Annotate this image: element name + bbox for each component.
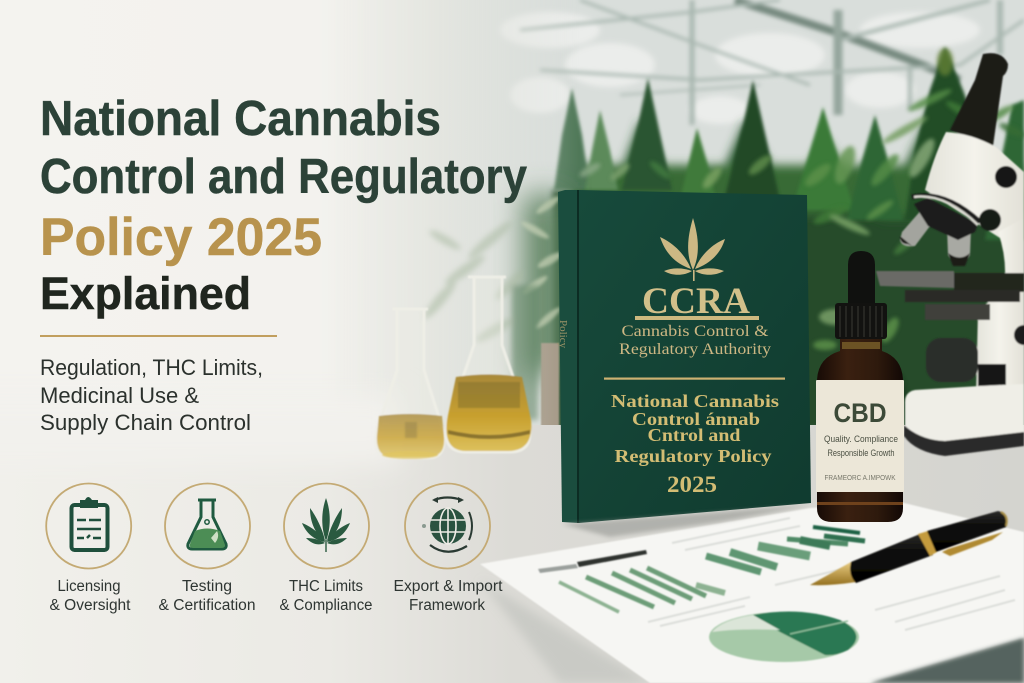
base [905,384,1024,450]
plants background [519,47,1024,435]
label: testing [158,578,256,614]
label: export import [394,578,503,614]
dropper bulb [848,251,875,305]
bottle: CBD dropper: FRAMEORC A.IMPOWK [824,473,896,482]
label: licensing: & Oversight [50,597,131,614]
book: CCRA policy [557,190,811,523]
subtitle: Regulation, THC Limits, [40,355,263,380]
book spine [558,190,579,523]
table surface [0,395,1024,683]
table front shadow [870,638,1024,683]
bottle: CBD dropper: Responsible Growth [828,448,894,458]
eyepiece tube [950,53,1008,146]
label: THC limits: & Compliance [280,597,372,614]
stage [876,271,954,288]
authority name: Cannabis Control & [622,323,768,340]
CCRA heading: CCRA [642,281,750,322]
label: testing: Testing [182,578,232,595]
label: testing: & Certification [158,597,256,614]
policy title on cover: Cntrol and [648,425,740,445]
flask small [376,309,444,459]
bar chart right [706,527,865,572]
hazy foliage behind flasks [421,218,538,420]
title: National Cannabis [40,92,441,146]
arm [975,218,1024,440]
background: greenhouse sky and roof [0,0,1024,440]
title: Explained [40,268,251,319]
ribbed cap [835,303,887,339]
label: licensing [50,578,131,614]
bottle: CBD dropper [816,251,904,522]
bottle body [817,339,903,522]
authority name: Regulatory Authority [619,341,771,358]
nosepiece [914,198,978,240]
foliage left of book [520,195,565,375]
title: Control and Regulatory [40,150,527,204]
policy title on cover: 2025 [667,472,717,497]
policy title on cover: Regulatory Policy [614,446,772,466]
leaf emblem [660,218,725,281]
label: export import: Export & Import [394,578,503,595]
icon: export import globe [405,484,490,568]
label: export import: Framework [409,597,485,614]
icon: licensing clipboard [46,484,131,568]
bottle: CBD dropper: CBD [834,398,886,428]
label: THC limits: THC Limits [289,578,363,595]
flask large [446,277,531,452]
policy title on cover [611,391,779,497]
title [40,92,527,319]
spine title: Policy [557,320,569,349]
subtitle [40,355,263,435]
left white fade [0,0,580,440]
authority name [619,323,771,358]
shadow under book [562,505,811,537]
document with charts [480,502,1024,683]
doc heading [538,564,578,573]
bottle label [816,380,904,492]
policy title on cover: Control ánnab [632,409,760,429]
subtitle: Medicinal Use & [40,383,199,408]
icon: testing flask [165,484,250,568]
bottle: CBD dropper: Quality. Compliance [824,434,898,445]
book cover [579,190,811,523]
icon: THC leaf [284,484,369,568]
bar chart left [559,568,725,612]
objectives [900,208,933,246]
policy title on cover: National Cannabis [611,391,779,411]
subtitle: Supply Chain Control [40,410,251,435]
glass flasks with oil [376,277,531,459]
title: Policy 2025 [40,208,322,267]
doc faint text lines [648,518,1015,630]
label: THC limits [280,578,372,614]
title divider [40,335,277,337]
microscope [876,53,1024,456]
pie chart [709,611,859,662]
focus knob [926,338,978,382]
label: licensing: Licensing [58,578,120,595]
pen [810,511,1007,585]
head [925,132,1024,262]
